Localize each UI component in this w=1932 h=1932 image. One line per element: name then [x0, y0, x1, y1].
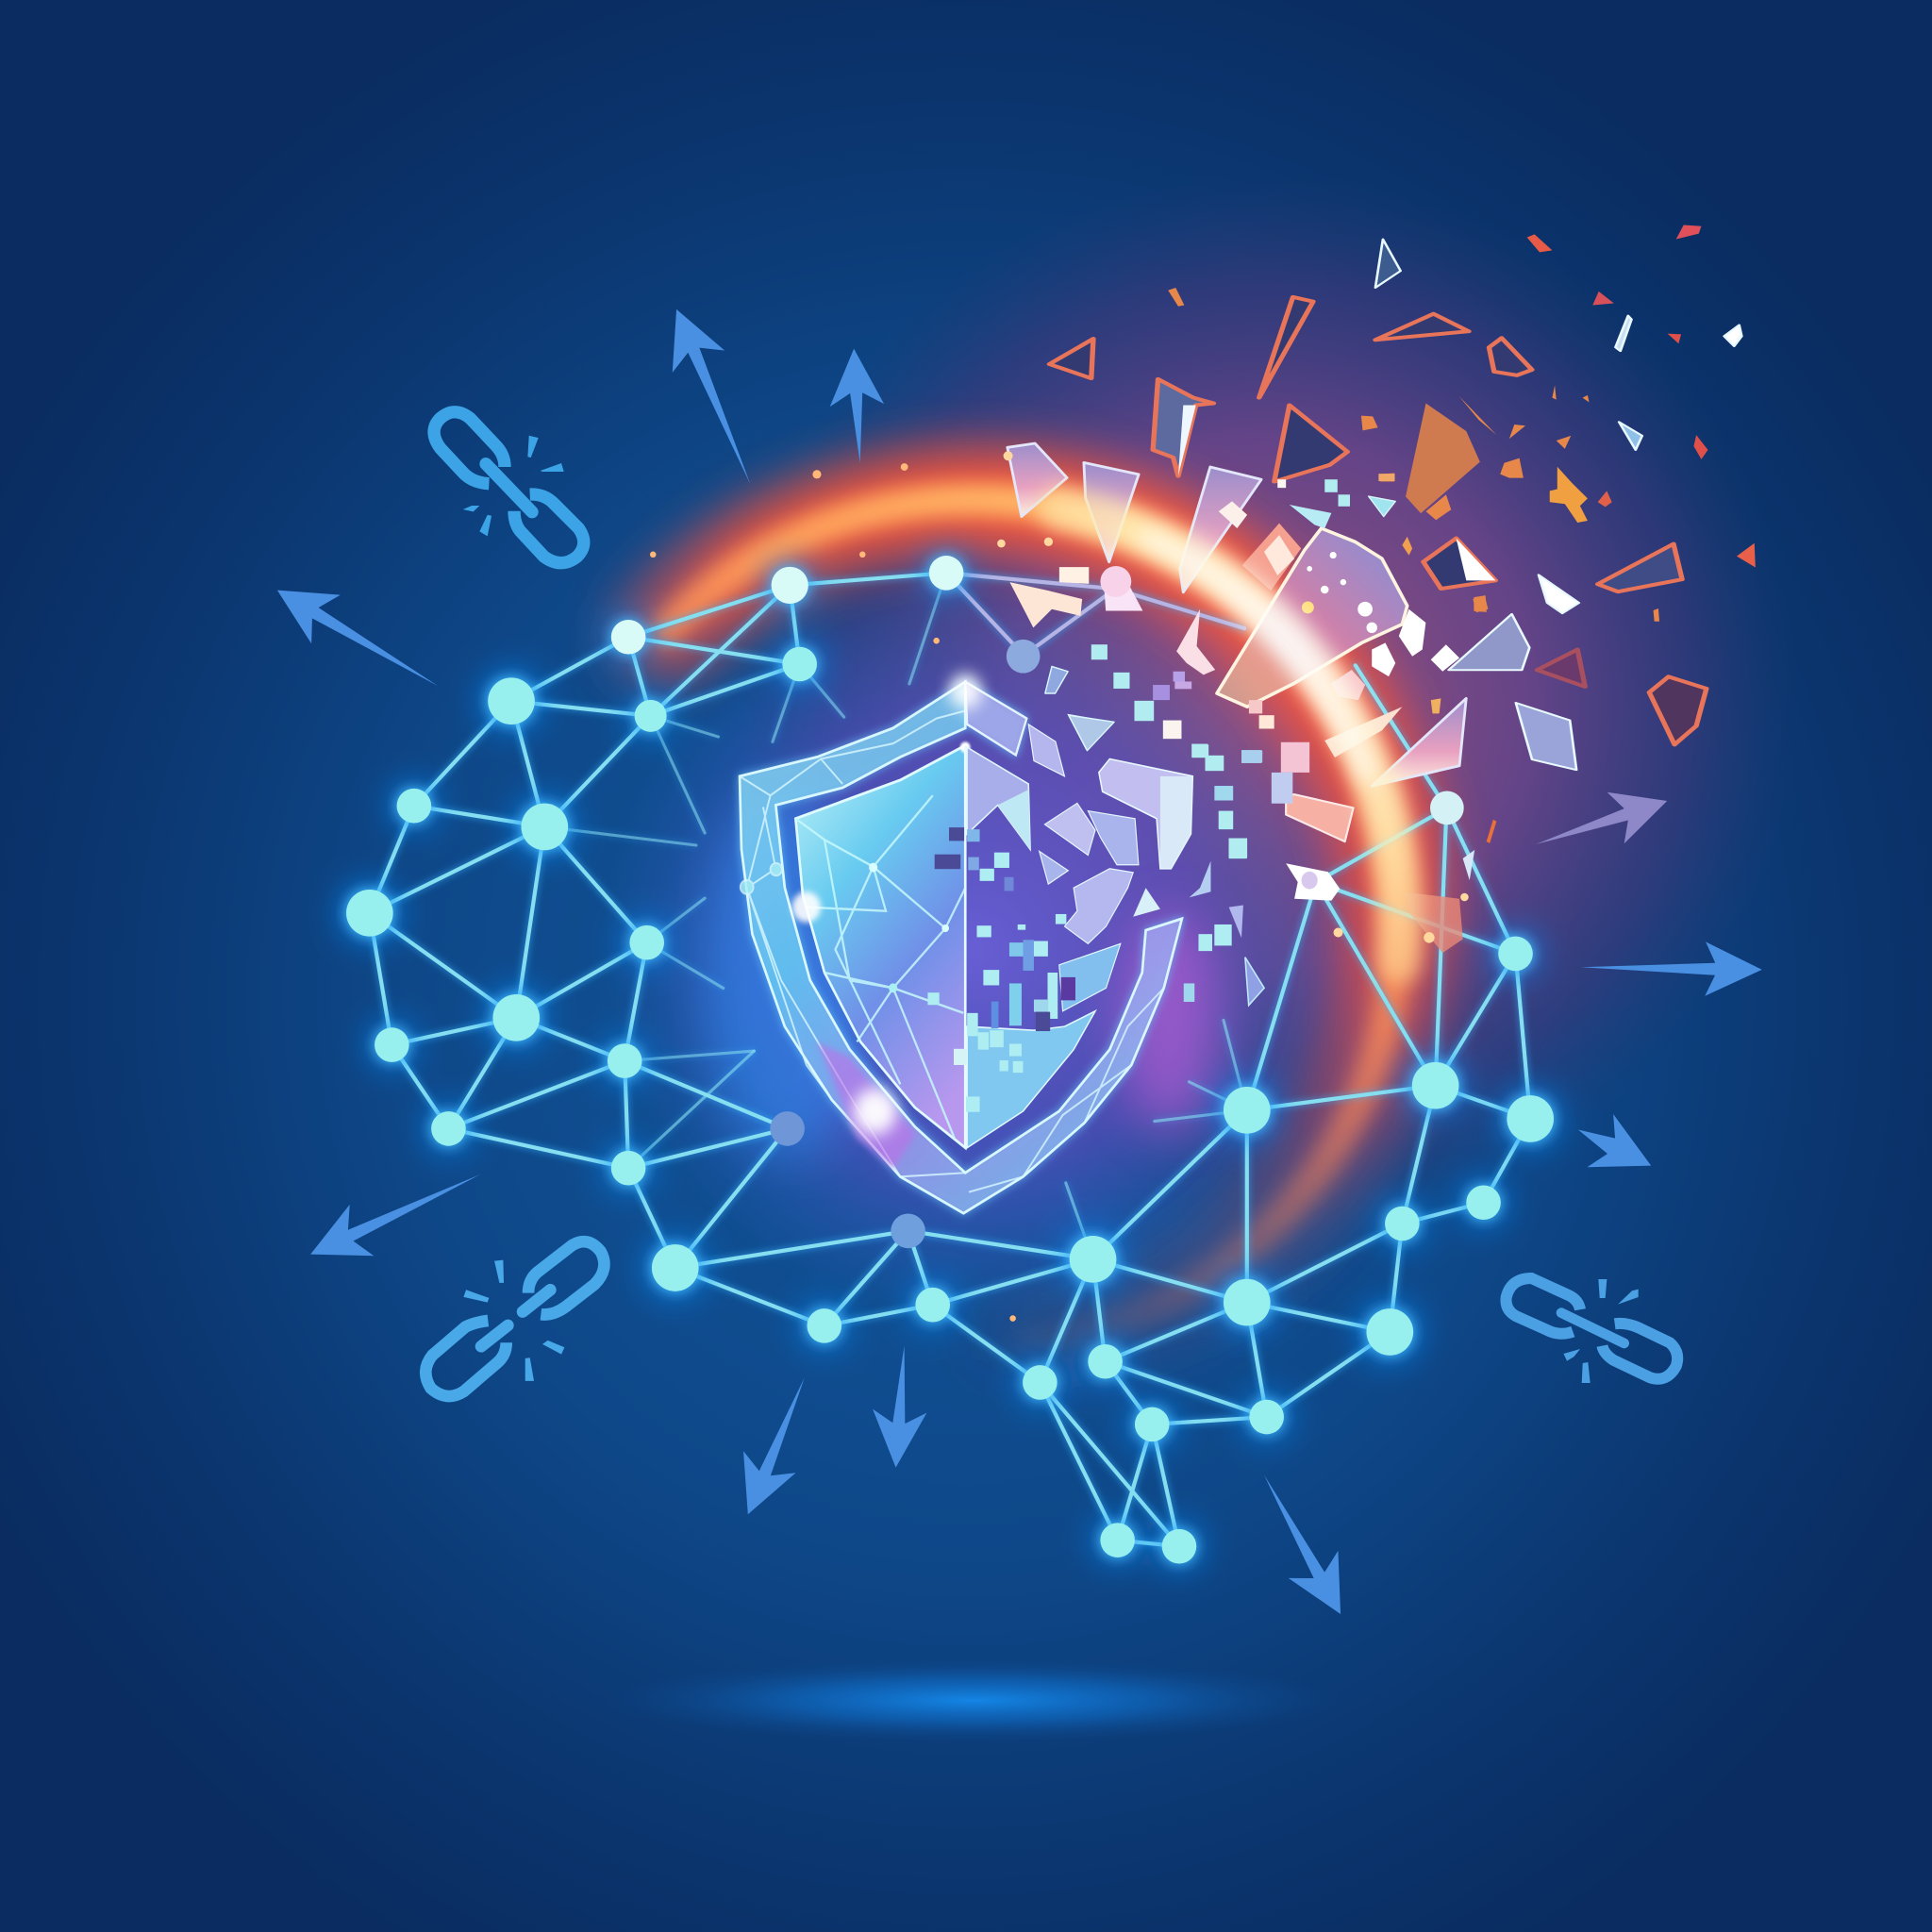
shield inner right half fragments	[967, 715, 1264, 1148]
arrow: down right	[1240, 1461, 1365, 1627]
arrows radiating outward	[262, 298, 1762, 1627]
bright fragments	[1009, 501, 1496, 953]
icon: broken chain right	[1506, 1278, 1677, 1383]
ember sparks left of the arc	[650, 463, 1016, 1322]
arrow: down	[869, 1344, 931, 1470]
icon: broken chain top left	[434, 412, 584, 563]
shield inner left half	[792, 674, 982, 1148]
faded network nodes	[770, 1111, 925, 1248]
arrow: right	[1580, 941, 1762, 997]
shield band facets	[740, 710, 1164, 1192]
arrow: far left down	[298, 1148, 493, 1280]
ember sparks	[997, 451, 1469, 943]
orange outlined shards	[1049, 297, 1707, 744]
arrow: right upper	[1527, 775, 1675, 870]
magenta glow right of shield	[1122, 912, 1220, 1134]
node on shards	[1007, 640, 1040, 674]
shield	[740, 674, 1264, 1213]
glass shards with warm gradient	[1008, 443, 1466, 786]
warm glow behind shards	[740, 173, 1799, 1232]
arrow: down left	[722, 1367, 831, 1525]
blue glow left of shield	[702, 789, 874, 1158]
arrow: up	[826, 347, 887, 464]
glowing energy arc	[665, 500, 1398, 1347]
band purple reflection	[817, 1041, 915, 1169]
pale blue shards	[1178, 240, 1741, 770]
cyan shards	[1045, 496, 1395, 751]
pixel squares on the arc	[1091, 474, 1395, 858]
arrow: up left	[650, 298, 776, 495]
arc highlight over shards	[1059, 508, 1400, 961]
pixel fragments	[927, 744, 1261, 1112]
purple halo behind shield	[604, 579, 1343, 1319]
shield outer band	[740, 682, 1182, 1213]
arrow: far left up	[262, 566, 453, 710]
network edges	[370, 573, 1530, 1546]
upper right network node	[1430, 791, 1464, 824]
floor glow	[604, 1658, 1343, 1742]
arrow: short right	[1565, 1103, 1664, 1192]
icon: broken chain bottom left	[425, 1241, 604, 1396]
cracked globe shard	[1217, 505, 1407, 707]
network nodes	[346, 556, 1554, 1563]
shards and pixels along the arc	[997, 443, 1496, 953]
outer flying shards	[1049, 225, 1756, 770]
orange and red small shards	[1168, 225, 1756, 622]
